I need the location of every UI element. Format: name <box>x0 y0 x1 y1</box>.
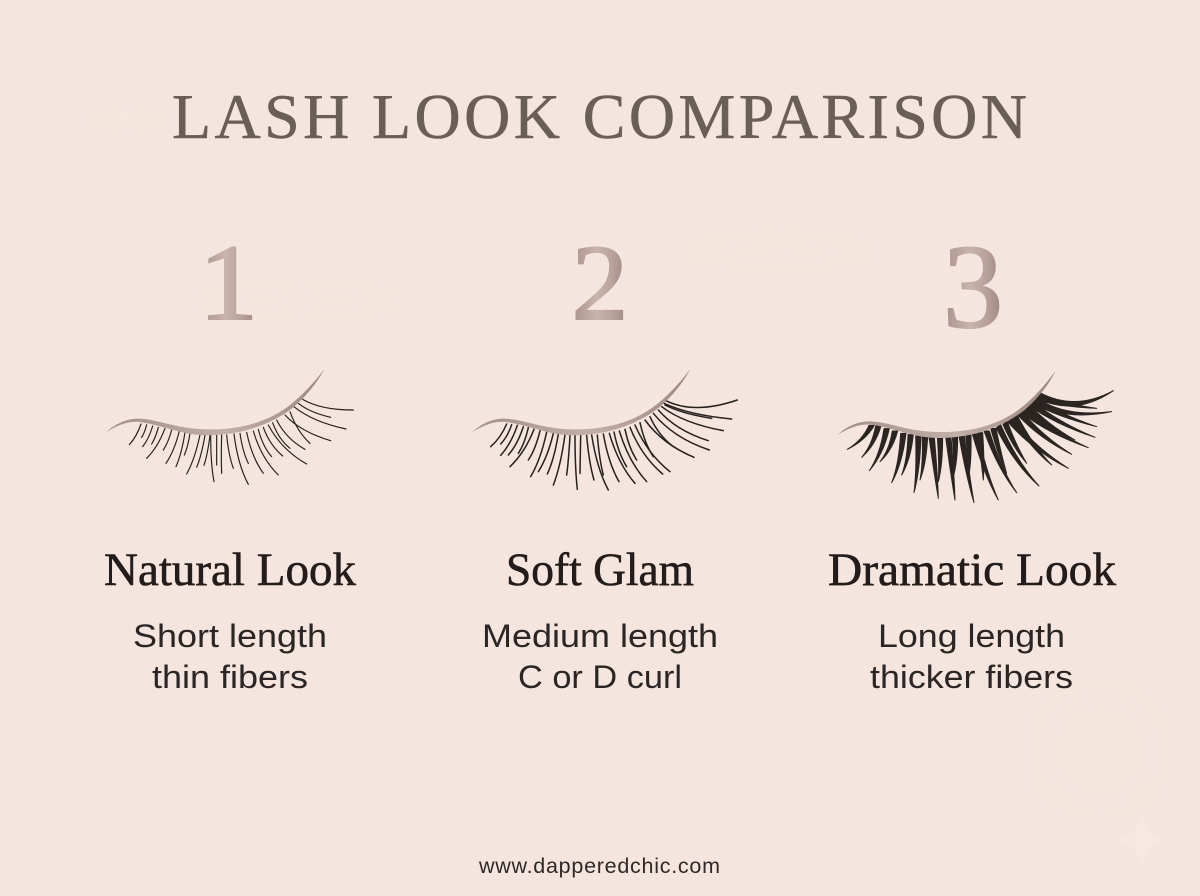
lash illustration: natural <box>106 369 353 484</box>
number 1: 1 <box>199 223 258 343</box>
description: natural look: thin fibers <box>152 659 308 695</box>
panel: natural look <box>104 223 357 695</box>
description: dramatic look: Long length <box>878 618 1065 654</box>
panel: dramatic look <box>828 220 1117 695</box>
icon: sparkle <box>1119 815 1167 865</box>
description: dramatic look: thicker fibers <box>870 659 1073 695</box>
heading: natural look: Natural Look <box>104 544 357 596</box>
lash illustration: dramatic <box>837 371 1113 503</box>
number 2: 2 <box>572 222 628 342</box>
number 3: 3 <box>943 220 1003 353</box>
heading: soft glam: Soft Glam <box>506 544 694 596</box>
description: soft glam <box>482 618 718 695</box>
description: soft glam: C or D curl <box>518 659 682 695</box>
description: soft glam: Medium length <box>482 618 718 654</box>
title: LASH LOOK COMPARISON <box>172 81 1027 152</box>
description: natural look <box>133 618 327 695</box>
website url: www.dapperedchic.com <box>478 854 720 878</box>
lash illustration: soft glam <box>472 369 737 490</box>
panel: soft glam <box>472 222 737 695</box>
heading: dramatic look: Dramatic Look <box>828 544 1117 596</box>
description: natural look: Short length <box>133 618 327 654</box>
description: dramatic look <box>870 618 1073 695</box>
